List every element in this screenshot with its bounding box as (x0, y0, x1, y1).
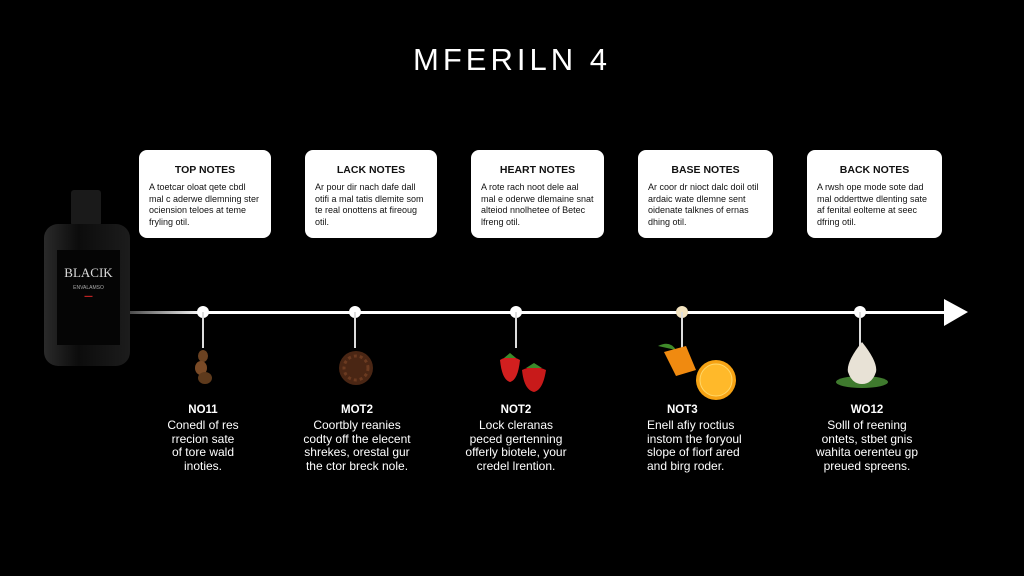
label 2: the ctor breck nole. (306, 459, 408, 473)
label 2: MOT2 (341, 404, 373, 416)
card: heart notes (471, 150, 604, 238)
label 4 (647, 404, 742, 473)
icon: strawberries (500, 353, 546, 392)
card: top notes: A toetcar oloat qete cbdl mal c aderwe dlemning ster ociension teloes at teme fryling otil. (149, 182, 259, 226)
label 1: Conedl of res (167, 418, 239, 432)
card: back notes: BACK NOTES (840, 164, 909, 176)
card: lack notes: Ar pour dir nach dafe dall otifi a mal tatis dlemite som te real onottens at fireoug otil. (315, 182, 424, 226)
label 3: peced gertenning (470, 432, 562, 446)
label 5: wahita oerenteu gp (816, 445, 918, 459)
card: top notes (139, 150, 271, 238)
label 2: codty off the elecent (303, 432, 411, 446)
label 1: NO11 (188, 404, 218, 416)
label 3: NOT2 (501, 404, 531, 416)
card: top notes: TOP NOTES (175, 164, 235, 176)
label 2 (303, 404, 411, 473)
icon: spice (195, 350, 212, 384)
label 5: preued spreens. (824, 459, 910, 473)
label 1: rrecion sate (172, 432, 234, 446)
label 5: WO12 (851, 404, 883, 416)
bottle: BLACIK (64, 265, 113, 280)
card: heart notes: A rote rach noot dele aal mal e oderwe dlemaine snat alteiod nnolhetee of Betec lfreng otil. (481, 182, 594, 226)
label 1: of tore wald (172, 445, 234, 459)
label 3: Lock cleranas (479, 418, 553, 432)
card: base notes: Ar coor dr nioct dalc doil otil ardaic wate dlemne sent oidenate talknes of ernas dhing otil. (648, 182, 759, 226)
label 3: offerly biotele, your (465, 445, 567, 459)
timeline arrow (130, 299, 968, 326)
label 2: Coortbly reanies (313, 418, 401, 432)
label 4: and birg roder. (647, 459, 724, 473)
label 4: Enell afiy roctius (647, 418, 734, 432)
card: heart notes: HEART NOTES (500, 164, 575, 176)
icon: garlic (836, 342, 888, 388)
title: MFERILN 4 (413, 42, 611, 77)
icon: cocoa (339, 351, 373, 385)
label 4: NOT3 (667, 404, 698, 416)
label 5: ontets, stbet gnis (822, 432, 912, 446)
bottle: ▬▬ (84, 293, 92, 298)
label 1 (167, 404, 239, 473)
card: back notes: A rwsh ope mode sote dad mal odderttwe dlenting sate af fenital eolteme at seec dfring otil. (817, 182, 927, 226)
bottle: ENVALAMSO (73, 285, 104, 291)
label 5: Solll of reening (827, 418, 907, 432)
card: base notes (638, 150, 773, 238)
label 4: slope of fiorf ared (647, 445, 740, 459)
card: back notes (807, 150, 942, 238)
card: lack notes (305, 150, 437, 238)
bottle (44, 190, 130, 366)
icon: orange (658, 344, 736, 400)
label 2: shrekes, orestal gur (304, 445, 410, 459)
label 3: credel lrention. (477, 459, 555, 473)
label 5 (816, 404, 918, 473)
label 4: instom the foryoul (647, 432, 742, 446)
card: base notes: BASE NOTES (671, 164, 740, 176)
label 3 (465, 404, 567, 473)
card: lack notes: LACK NOTES (337, 164, 405, 176)
label 1: inoties. (184, 459, 222, 473)
